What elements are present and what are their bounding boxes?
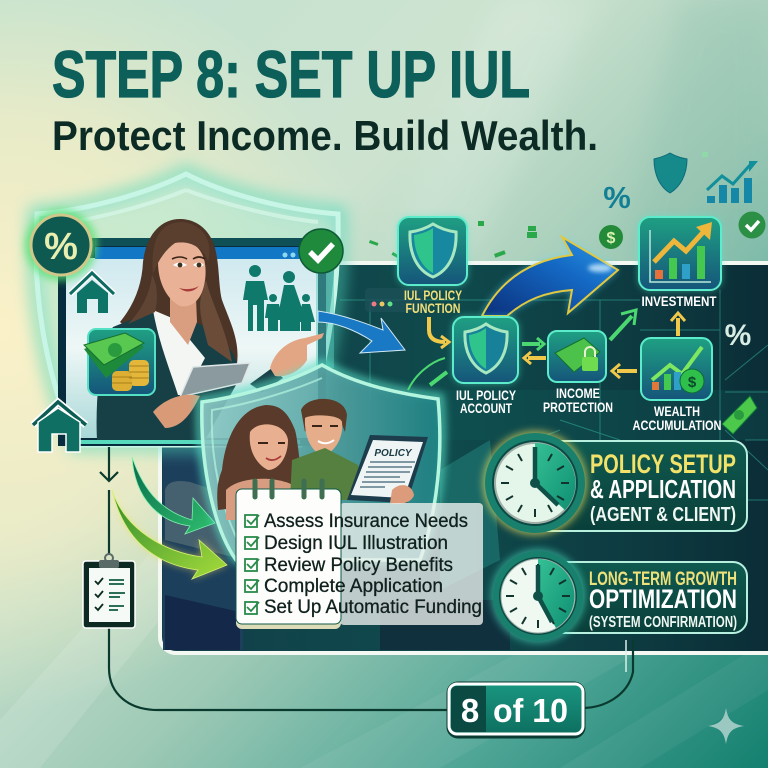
banner: long-term growth	[538, 562, 747, 633]
icon: percent small: %	[603, 180, 631, 215]
icon: growth chart	[707, 161, 758, 203]
checklist notepad: Complete Application	[264, 575, 443, 597]
icon: family	[243, 265, 315, 331]
arrow: big blue curved	[482, 237, 618, 316]
shirt	[153, 310, 205, 395]
icon: dollar coin	[599, 225, 623, 249]
tile: income protection	[543, 331, 613, 415]
tile: income protection: PROTECTION	[543, 400, 613, 415]
icon: clipboard	[83, 554, 135, 628]
checklist notepad: Review Policy Benefits	[264, 554, 453, 576]
hair back	[120, 219, 238, 364]
glass shield with couple: POLICY	[374, 448, 413, 459]
man client	[301, 399, 347, 432]
icon: check small	[738, 212, 766, 238]
tile: IUL policy function	[398, 217, 467, 316]
large glass shield	[34, 172, 340, 445]
woman advisor	[97, 219, 324, 440]
tablet	[180, 363, 250, 397]
icon: clock two	[491, 549, 585, 643]
tile: IUL policy function: FUNCTION	[406, 301, 460, 316]
checklist notepad: Design IUL Illustration	[264, 532, 448, 554]
icon: percent badge: %	[44, 226, 78, 268]
tile: IUL policy function: IUL POLICY	[404, 288, 462, 303]
icon: dollar coin: $	[607, 230, 616, 247]
banner: policy setup: (AGENT & CLIENT)	[590, 504, 736, 526]
neck	[170, 298, 197, 345]
pointing arm	[250, 368, 283, 392]
arrow: dark green curved	[132, 457, 215, 534]
confetti	[369, 152, 708, 259]
checklist notepad: Assess Insurance Needs	[264, 510, 468, 532]
tile: IUL policy account: IUL POLICY	[456, 388, 516, 403]
tile: wealth accumulation: WEALTH	[654, 404, 700, 419]
icon: money tile	[84, 329, 155, 395]
icon: sparkle star	[708, 708, 744, 744]
tile: wealth accumulation: ACCUMULATION	[632, 418, 722, 433]
tile: income protection: INCOME	[556, 386, 600, 401]
presentation screen	[58, 238, 334, 446]
flow arrows between tiles	[408, 310, 685, 390]
banner: policy setup	[535, 441, 747, 531]
panel percent glyph: %	[725, 319, 751, 352]
tile: wealth accumulation	[632, 338, 722, 433]
title: STEP 8: SET UP IUL	[52, 37, 530, 111]
hair front	[152, 222, 210, 275]
floating money	[722, 396, 757, 434]
connector line with arrow	[100, 447, 633, 710]
icon: shield small	[654, 153, 687, 193]
progress badge: 8	[461, 692, 479, 729]
subtitle: Protect Income. Build Wealth.	[52, 112, 598, 159]
policy tablet	[347, 435, 428, 503]
checklist notepad	[236, 481, 483, 629]
hand holding tablet	[153, 395, 200, 428]
main dark panel	[160, 263, 768, 653]
tile: investment	[639, 217, 721, 309]
tile: IUL policy account: ACCOUNT	[460, 401, 513, 416]
face	[158, 242, 206, 306]
tile: wealth accumulation: $	[688, 374, 697, 391]
glass shield with couple	[200, 363, 442, 560]
woman client	[217, 405, 305, 510]
blazer	[97, 312, 240, 440]
checklist notepad: Set Up Automatic Funding	[264, 596, 482, 618]
arrow: blue pointing to flow	[318, 311, 405, 353]
progress badge: of 10	[493, 692, 568, 729]
checklist items	[245, 515, 259, 614]
tile: IUL policy account	[453, 317, 518, 416]
icon: check badge	[299, 229, 343, 273]
tile: investment: INVESTMENT	[642, 293, 717, 309]
icon: clock one	[483, 431, 587, 535]
arrow: lime green curved	[112, 490, 227, 579]
progress badge	[449, 684, 583, 736]
icon: house large	[33, 402, 86, 452]
icon: percent badge	[25, 209, 97, 281]
icon: house	[70, 273, 114, 313]
